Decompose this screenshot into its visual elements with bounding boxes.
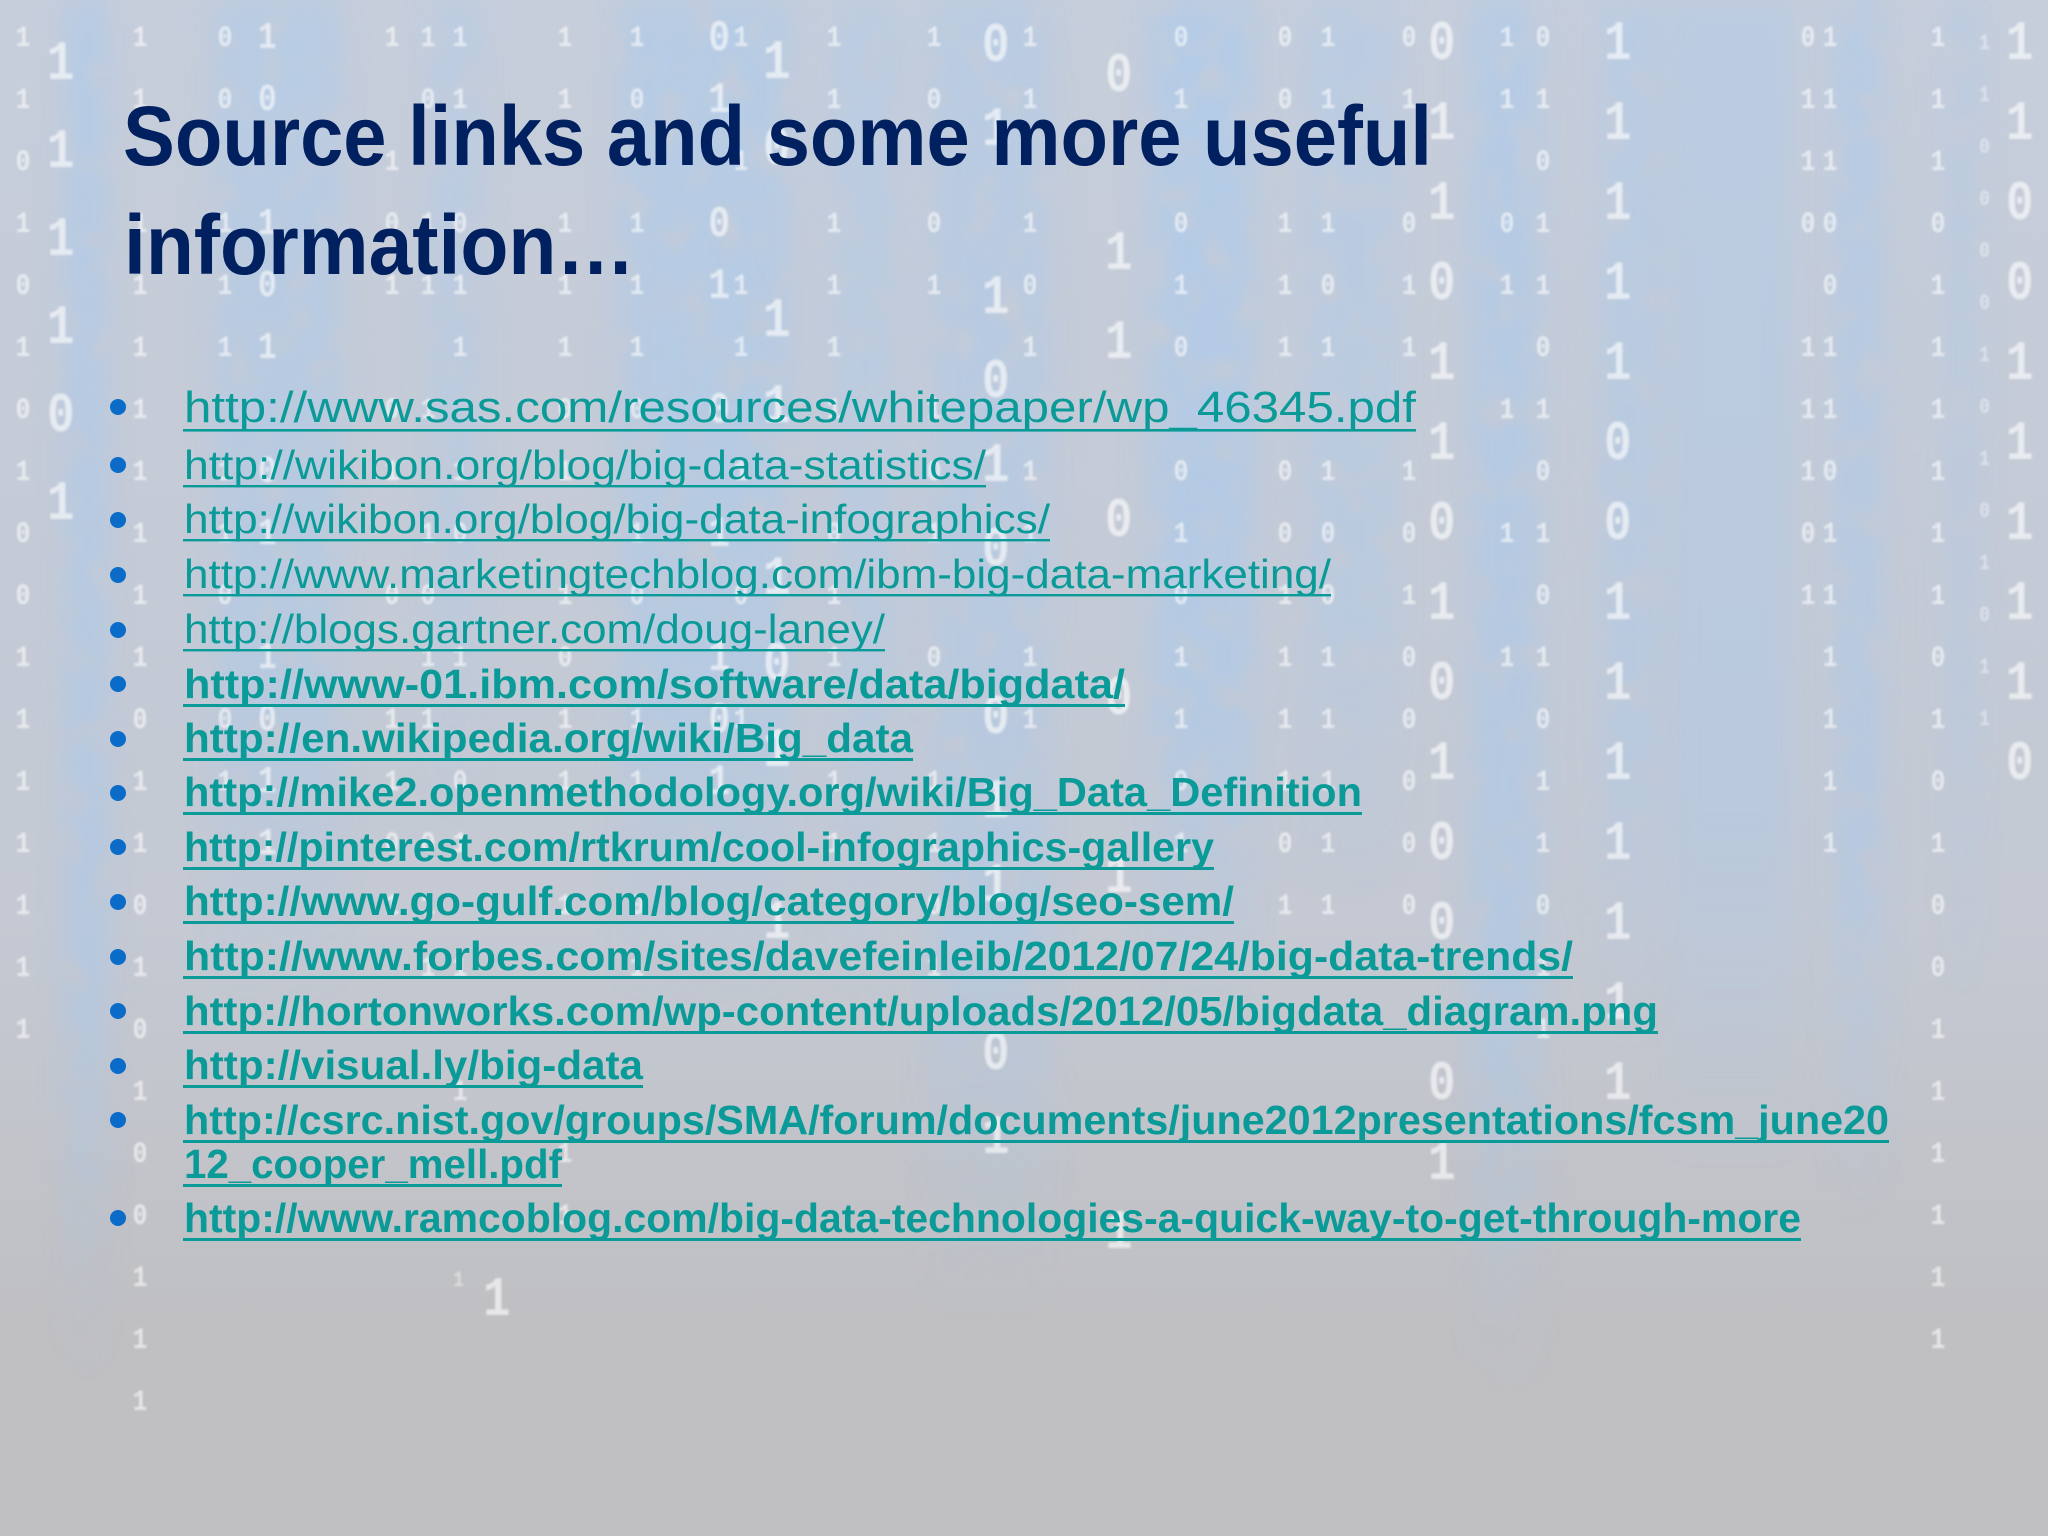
background: binary digit rain: 1	[453, 1268, 464, 1293]
background: binary digit rain: 10 01 101 0 1101	[927, 22, 941, 986]
panel: source links list	[110, 383, 1889, 1241]
link 2: http://wikibon.org/blog/big-data-statistics/	[184, 442, 987, 488]
background: binary digit rain: 11 1111 011 11	[827, 22, 841, 862]
background: binary digit rain: 0 11 0 0 1 1	[1105, 44, 1133, 1265]
link 3: http://wikibon.org/blog/big-data-infographics/	[184, 496, 1051, 542]
background: binary digit rain: 11 011 10 1 01 1 1	[453, 22, 467, 1110]
background: binary digit rain: 01 011 10100000	[1402, 22, 1416, 924]
background: binary digit rain: 11100110111111	[1823, 22, 1837, 862]
link 11: http://www.forbes.com/sites/davefeinleib/2012/07/24/big-data-trends/	[184, 933, 1573, 979]
link 6: http://www-01.ibm.com/software/data/bigdata/	[184, 661, 1125, 707]
background: binary digit rain: 01011010101011011	[1536, 22, 1550, 1048]
background: binary digit rain: 1110111111010100111111	[1931, 22, 1945, 1358]
background: binary digit rain: 1 101 01 0 1101	[385, 22, 399, 924]
background: binary digit rain: 1 1 11 1 0 1	[734, 22, 748, 738]
title	[123, 89, 1432, 292]
background: binary digit rain: 01 1010 011 01	[982, 14, 1010, 1170]
link 7: http://en.wikipedia.org/wiki/Big_data	[184, 715, 914, 761]
background: binary digit rain: 11 101 11 11	[1023, 22, 1037, 738]
background: binary digit rain: 00 111 110 01	[218, 22, 232, 800]
background: binary digit rain: 00 111 00111101	[1278, 22, 1292, 924]
background: binary digit rain: 01 010 0101101	[1174, 22, 1188, 862]
background: binary digit rain: 11000010101011	[1979, 31, 1990, 732]
background: binary digit rain: 11111001111111	[1604, 12, 1632, 1116]
link 10: http://www.go-gulf.com/blog/category/blog/seo-sem/	[184, 878, 1234, 924]
background: binary digit rain: 0110 11101	[1801, 22, 1815, 614]
link 14: 12_cooper_mell.pdf	[184, 1141, 562, 1187]
background: binary digit rain: 10 101 01 1011	[258, 17, 277, 866]
background: binary digit rain: 11010101001111111	[16, 22, 30, 1048]
background: binary digit rain: 10 1110 10 11 01	[630, 22, 644, 986]
link 14	[110, 1097, 1889, 1187]
background: binary digit rain: 01 01 0 1 101	[708, 14, 730, 808]
link 14: http://csrc.nist.gov/groups/SMA/forum/documents/june2012presentations/fcsm_june20	[184, 1097, 1889, 1143]
background: pale wide light column	[1670, 0, 1795, 1170]
link 4: http://www.marketingtechblog.com/ibm-big-data-marketing/	[184, 551, 1332, 597]
background: binary digit rain: 11 11101 1011 1 11	[558, 22, 572, 1234]
background: binary digit rain: 11 101 10011111	[1321, 22, 1335, 924]
link 12: http://hortonworks.com/wp-content/uploads/2012/05/bigdata_diagram.png	[184, 988, 1658, 1034]
title: information…	[124, 198, 635, 292]
link 8: http://mike2.openmethodology.org/wiki/Big_Data_Definition	[184, 769, 1362, 815]
background: binary digit rain: 111101	[47, 32, 75, 536]
background: binary digit rain: 1	[483, 1268, 511, 1332]
background: binary digit rain: 10 11 1 1011 011	[421, 22, 435, 986]
link 15: http://www.ramcoblog.com/big-data-technologies-a-quick-way-to-get-through-more	[184, 1195, 1801, 1241]
background: binary digit rain: 1100111110	[2006, 12, 2034, 796]
link 9: http://pinterest.com/rtkrum/cool-infographics-gallery	[184, 824, 1214, 870]
title: Source links and some more useful	[123, 89, 1432, 183]
link 5: http://blogs.gartner.com/doug-laney/	[184, 606, 886, 652]
background: binary digit rain: 10 11 101 1	[763, 31, 791, 955]
link 13: http://visual.ly/big-data	[184, 1042, 644, 1088]
background: binary digit rain: 011011010100 01	[1428, 12, 1456, 1196]
link 1: http://www.sas.com/resources/whitepaper/wp_46345.pdf	[184, 383, 1417, 432]
background: binary digit rain: 11 11111111011010100111	[133, 22, 147, 1420]
background: binary digit rain: 11 01 1 1 1	[1500, 22, 1514, 676]
